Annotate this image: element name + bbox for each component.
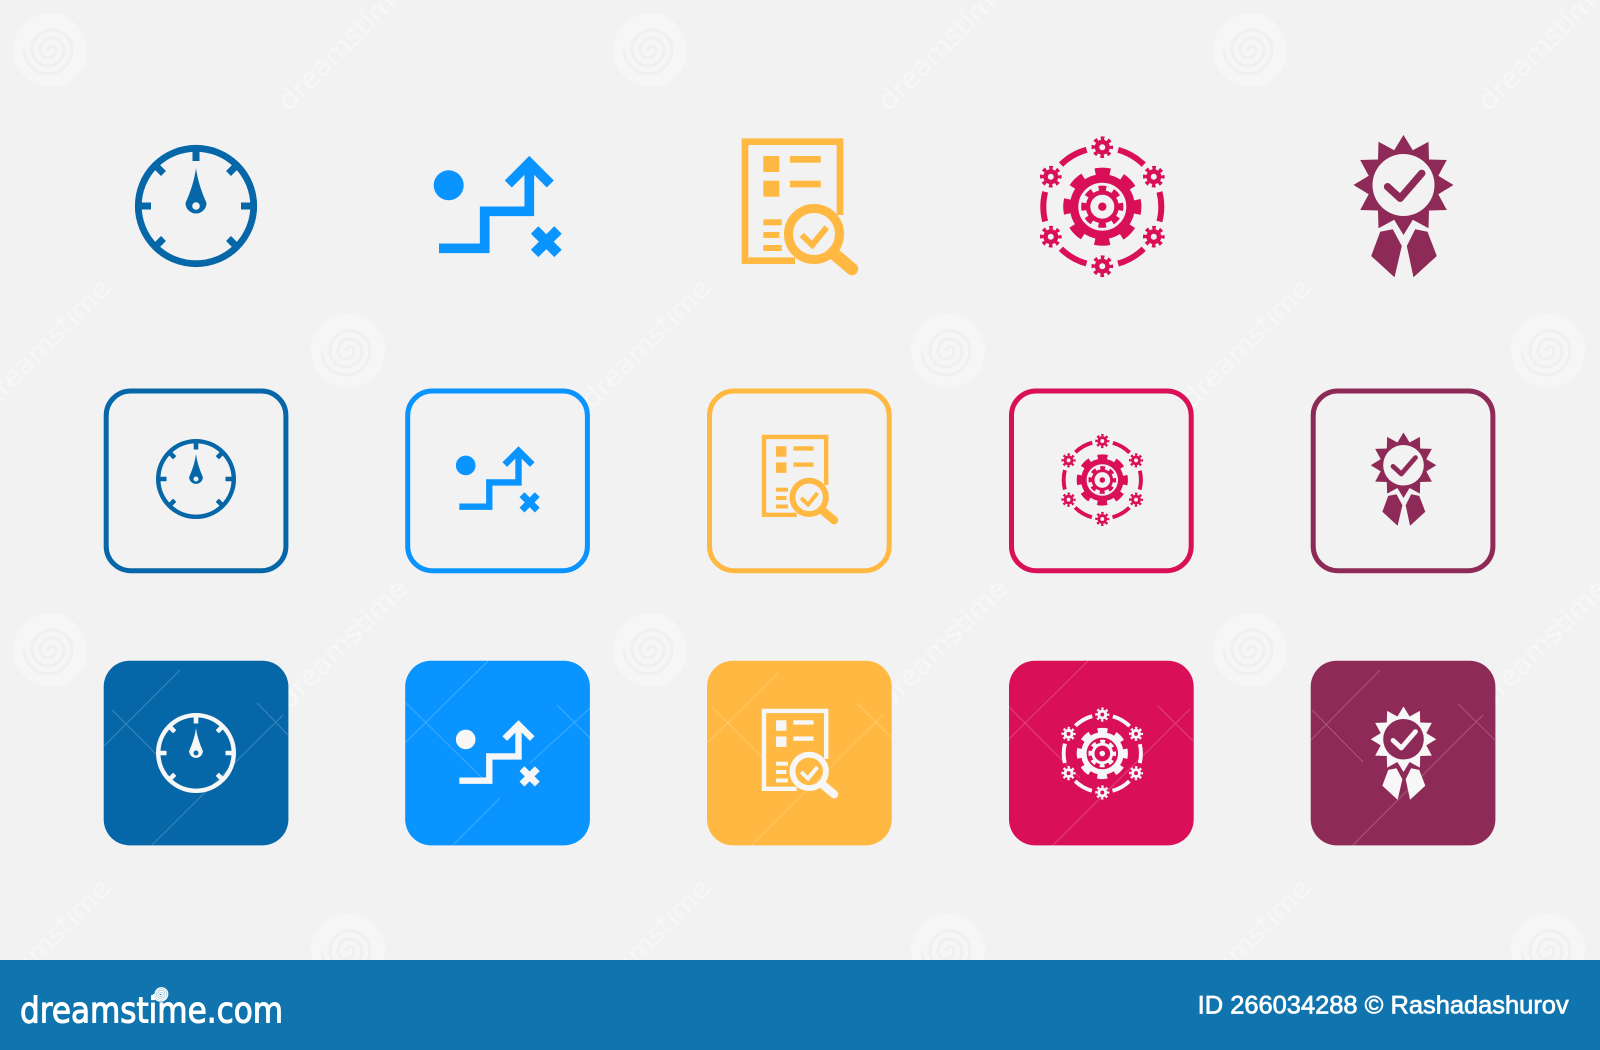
filled gauge tile (104, 661, 288, 845)
outlined document tile (710, 391, 889, 571)
watermark spirals and text: dreamstime (1175, 273, 1317, 415)
watermark spirals and text: dreamstime (272, 573, 414, 715)
outlined badge tile (1313, 391, 1493, 571)
watermark spirals and text: dreamstime (575, 873, 717, 1015)
row 3: filled icons (104, 661, 1495, 845)
row 2: outlined icons (106, 391, 1493, 571)
icon: gauge (136, 146, 256, 264)
icon: stairs with arrow (434, 163, 558, 253)
logo: dreamstime.com: dreamstime.com (20, 991, 283, 1032)
footer bar (0, 960, 1600, 1050)
outlined stairs tile (408, 391, 587, 571)
filled stairs tile (405, 661, 590, 845)
filled document tile (707, 661, 892, 845)
icon: gears network (1042, 138, 1163, 275)
image id and author credit: ID 266034288 © Rashadashurov (1198, 991, 1569, 1019)
filled badge tile (1311, 661, 1495, 845)
icon: award badge (1354, 135, 1454, 277)
filled gears tile (1009, 661, 1194, 845)
icon: document with magnifier (745, 142, 852, 269)
outlined gauge tile (106, 391, 286, 571)
watermark spirals and text: dreamstime (872, 573, 1014, 715)
watermark spirals and text: dreamstime (575, 273, 717, 415)
outlined gears tile (1012, 391, 1191, 571)
row 1: plain icons (136, 135, 1454, 277)
watermark spirals and text: dreamstime (1175, 873, 1317, 1015)
